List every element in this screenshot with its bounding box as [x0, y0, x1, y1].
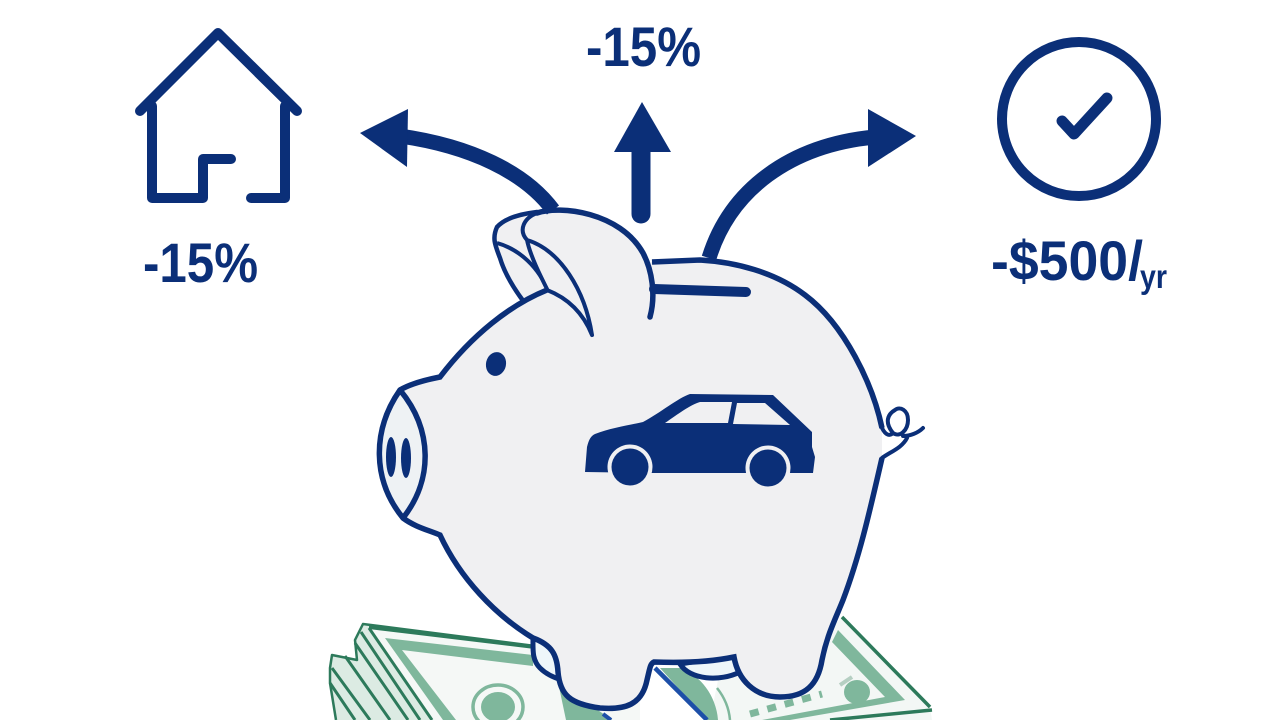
coin slot	[654, 289, 746, 292]
eye	[484, 350, 508, 378]
icon: piggy bank	[379, 208, 923, 708]
tail	[882, 408, 923, 458]
ear inner lines	[523, 213, 592, 335]
label: minus 500 dollars per year: yr	[1140, 258, 1167, 295]
back left foot	[533, 638, 570, 680]
label: center minus 15 percent: -15%	[586, 15, 701, 78]
label: home minus 15 percent: -15%	[143, 231, 258, 294]
snout	[379, 390, 425, 518]
belly and feet outline	[403, 458, 882, 708]
arrow: center up	[614, 102, 671, 214]
back right foot	[680, 655, 740, 678]
icon: stack of money	[330, 617, 932, 720]
icon: car	[585, 394, 815, 490]
head outline	[400, 290, 547, 390]
front ear outline	[537, 210, 653, 317]
back ear	[494, 212, 560, 302]
icon: house	[140, 33, 297, 198]
pig body	[400, 208, 882, 708]
label: minus 500 dollars per year: -$500/	[991, 229, 1143, 292]
back outline	[652, 260, 882, 428]
back ear fold	[497, 243, 547, 288]
nostrils	[386, 437, 396, 477]
arrow: right curved	[709, 109, 916, 258]
arrow: left curved	[360, 109, 553, 210]
icon: check circle	[1002, 42, 1156, 196]
